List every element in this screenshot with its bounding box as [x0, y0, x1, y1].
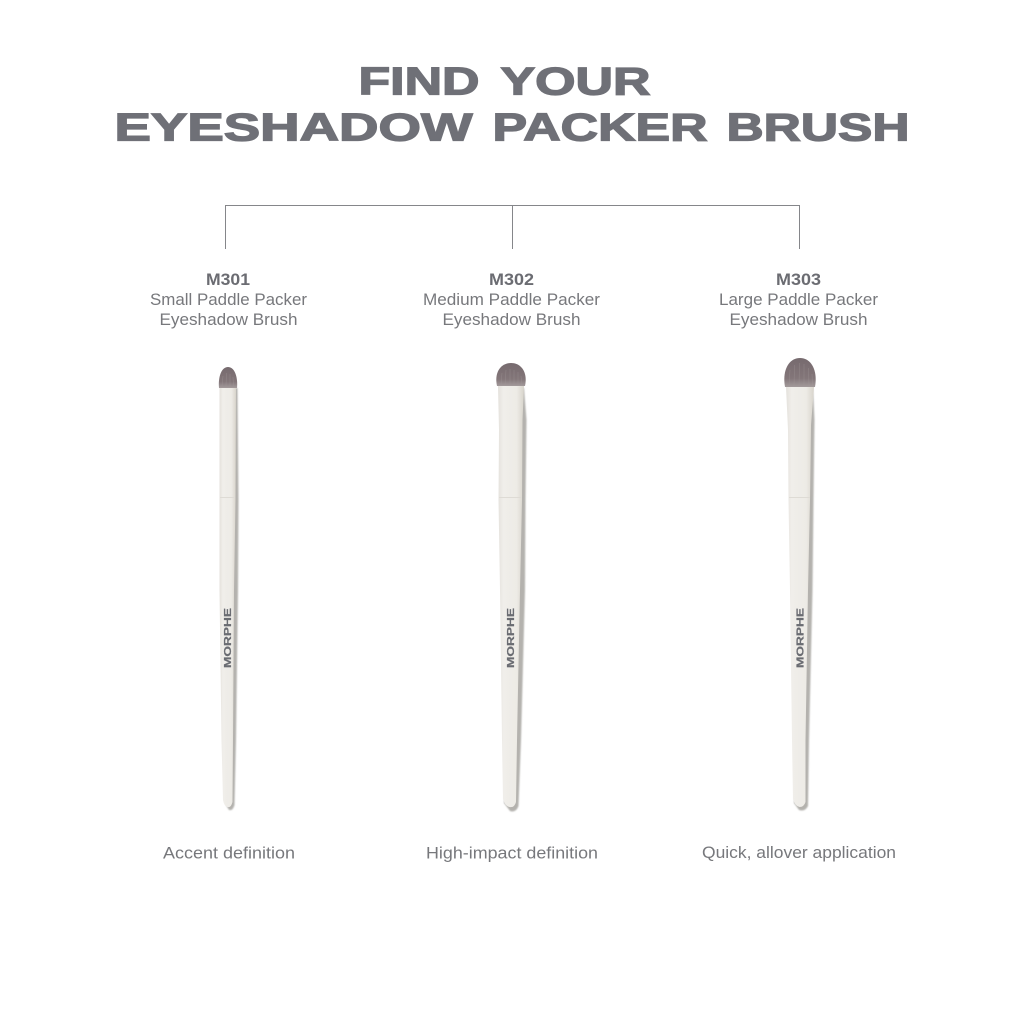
label: M302: Medium Paddle Packer: [423, 291, 601, 309]
brand mark: MORPHE: [505, 608, 517, 668]
label: M302: M302: [489, 270, 534, 289]
caption: M303 use: Quick, allover application: [702, 844, 896, 862]
label: M303: [719, 270, 879, 329]
title: EYESHADOW: [114, 106, 473, 150]
caption: M301 use: Accent definition: [163, 844, 295, 862]
brand mark: MORPHE: [794, 608, 806, 668]
label: M301: [150, 270, 308, 329]
brand mark: MORPHE: [222, 608, 234, 668]
brush: M301: [219, 367, 238, 810]
bracket connector: [226, 206, 800, 249]
label: M303: Large Paddle Packer: [719, 291, 879, 309]
label: M301: M301: [206, 270, 250, 289]
title: PACKER: [492, 106, 708, 150]
title: YOUR: [500, 60, 651, 104]
label: M303: Eyeshadow Brush: [730, 311, 868, 329]
label: M301: Eyeshadow Brush: [160, 311, 298, 329]
brush: M302: [496, 363, 526, 811]
label: M302: Eyeshadow Brush: [442, 311, 580, 329]
label: M301: Small Paddle Packer: [150, 291, 308, 309]
title: BRUSH: [726, 106, 910, 150]
label: M303: M303: [776, 270, 821, 289]
label: M302: [423, 270, 601, 329]
caption: M302 use: High-impact definition: [426, 844, 598, 862]
brush: M303: [784, 358, 816, 810]
title: FIND: [358, 60, 480, 104]
title: [114, 60, 910, 150]
